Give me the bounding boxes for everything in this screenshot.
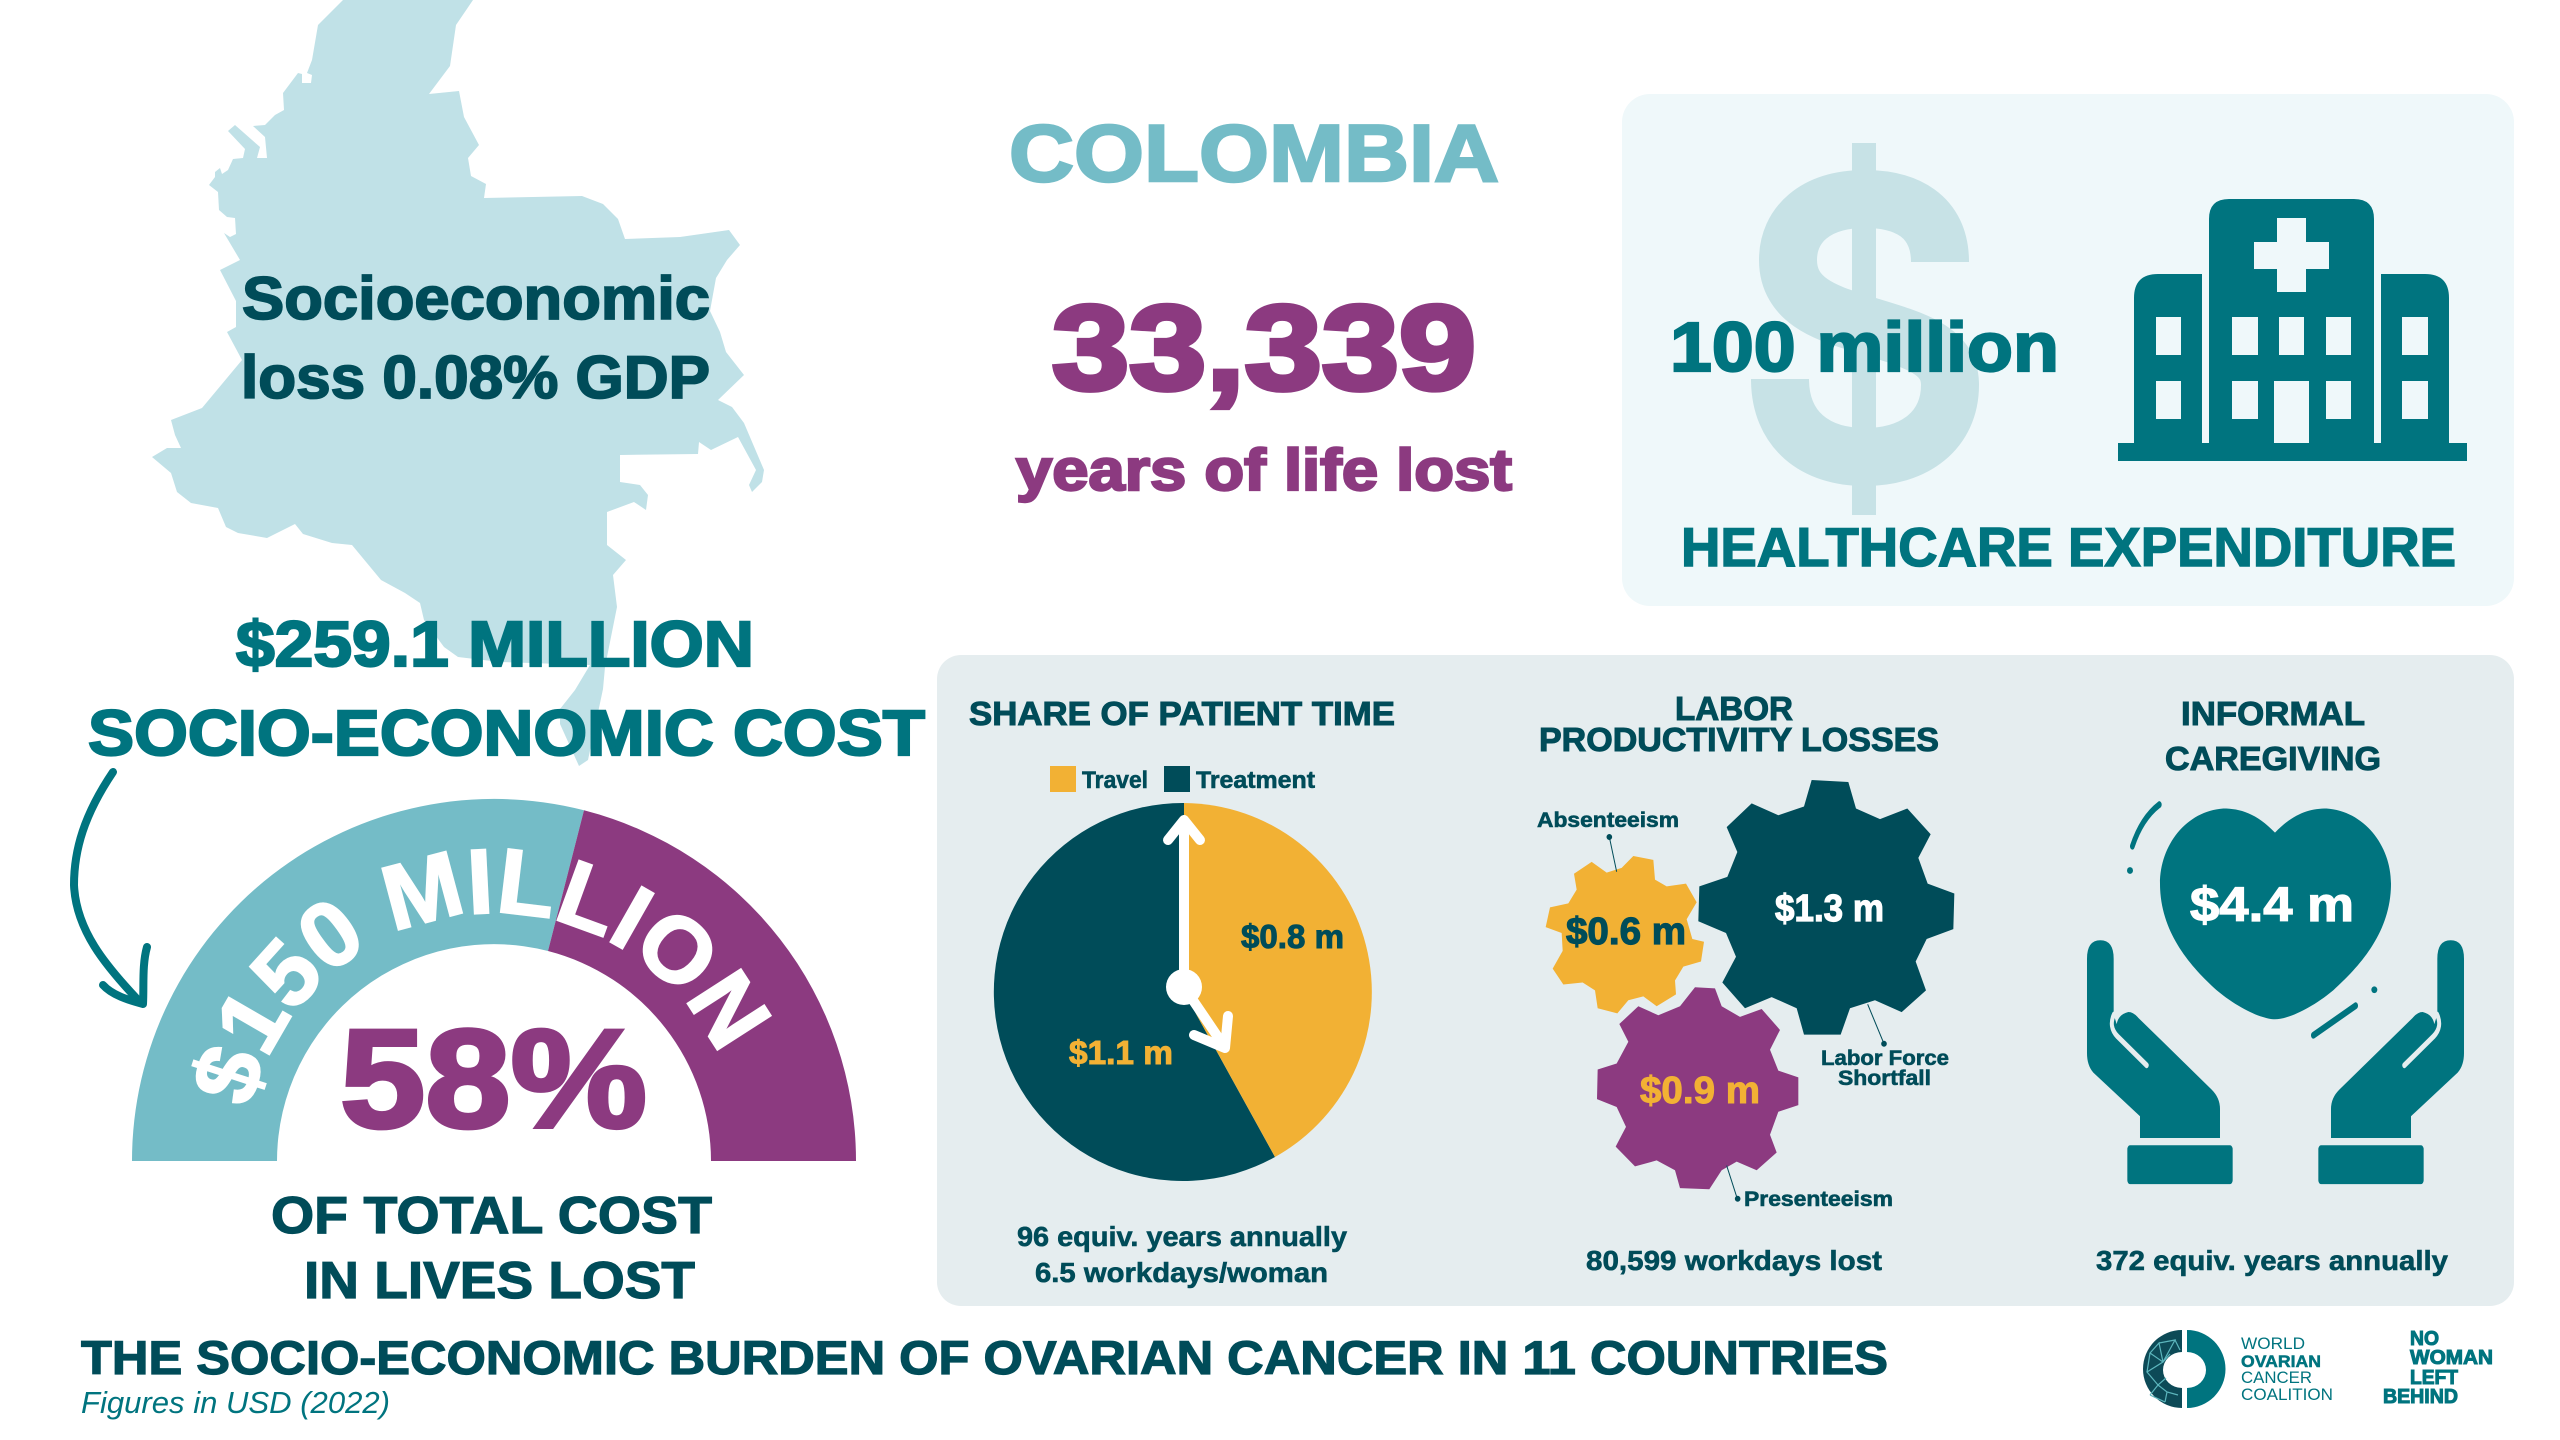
label: labor force shortfall [1821,1047,1949,1090]
logo: no woman left behind: BEHIND [2383,1386,2458,1408]
value: absenteeism: $0.6 m [1566,911,1686,953]
section: labor productivity losses [1537,690,1954,1276]
heading: total socio-economic cost: SOCIO-ECONOMIC COST [88,697,925,769]
icon: hospital [2118,199,2467,461]
panel: healthcare expenditure [1622,94,2514,606]
logo: no woman left behind [2383,1328,2493,1408]
label: presenteeism: Presenteeism [1744,1188,1893,1211]
note: caregiving years: 372 equiv. years annually [2096,1245,2448,1276]
heading: labor productivity losses: LABOR [1675,690,1793,727]
section: informal caregiving [2087,695,2464,1276]
label: labor force shortfall: Shortfall [1838,1067,1931,1090]
value: travel: $0.8 m [1241,918,1344,955]
title: country: COLOMBIA [1009,109,1499,199]
heading: share of patient time: SHARE OF PATIENT TIME [969,695,1395,732]
map caption: socioeconomic loss: Socioeconomic [242,265,710,332]
clock hands [1166,820,1228,1048]
icon: heart in hands [2087,805,2464,1184]
logo: no woman left behind: LEFT [2410,1367,2458,1389]
value: presenteeism: $0.9 m [1640,1070,1760,1112]
section: share of patient time [969,695,1395,1288]
gauge chart: lives lost share: $150 MILLION [191,848,772,1104]
gauge caption: IN LIVES LOST [304,1252,695,1310]
value: 100 million: 100 million [1670,308,2059,386]
legend [1050,766,1315,794]
logo: world ovarian cancer coalition [2143,1330,2333,1408]
gauge caption [271,1187,712,1310]
note: patient time: 96 equiv. years annually [1017,1221,1347,1252]
footer note: Figures in USD (2022) [81,1385,390,1420]
label: healthcare expenditure: HEALTHCARE EXPENDITURE [1681,516,2456,578]
map caption: socioeconomic loss [241,265,710,411]
arrow to gauge [74,772,147,1004]
pie chart [994,803,1372,1181]
heading: informal caregiving: CAREGIVING [2165,740,2381,777]
heading: informal caregiving: INFORMAL [2181,695,2365,732]
logo: no woman left behind: WOMAN [2410,1347,2493,1369]
gauge caption: OF TOTAL COST [271,1187,712,1245]
panel: cost breakdown [937,655,2514,1306]
logo: world ovarian cancer coalition: COALITION [2241,1385,2333,1404]
label: absenteeism: Absenteeism [1537,809,1679,832]
statistic: years of life lost: years of life lost [1016,438,1512,503]
heading: total socio-economic cost [88,608,925,769]
gauge value: 58% [340,1000,647,1157]
note: patient time: 6.5 workdays/woman [1035,1257,1328,1288]
heading: labor productivity losses: PRODUCTIVITY LOSSES [1539,721,1939,758]
gauge chart: lives lost share [132,798,856,1161]
logo: world ovarian cancer coalition: OVARIAN [2241,1352,2321,1371]
note: workdays lost: 80,599 workdays lost [1586,1245,1882,1276]
logo: world ovarian cancer coalition: CANCER [2241,1368,2312,1387]
value: treatment: $1.1 m [1069,1034,1173,1071]
icon: dollar sign [1780,143,1950,515]
map of Colombia [152,0,764,766]
logo: no woman left behind: NO [2410,1328,2439,1350]
note: patient time [1017,1221,1347,1288]
legend: Travel [1082,767,1148,794]
label: labor force shortfall: Labor Force [1821,1047,1949,1070]
statistic: years of life lost: 33,339 [1052,281,1476,415]
map caption: socioeconomic loss: loss 0.08% GDP [241,344,710,411]
gears [1546,780,1954,1201]
footer title: THE SOCIO-ECONOMIC BURDEN OF OVARIAN CANCER IN 11 COUNTRIES [81,1331,1888,1384]
legend: Treatment [1196,767,1315,794]
logo: world ovarian cancer coalition: WORLD [2241,1334,2305,1353]
value: labor force shortfall: $1.3 m [1775,888,1884,930]
statistic: years of life lost [1016,281,1512,503]
heading: total socio-economic cost: $259.1 MILLION [236,608,754,680]
heading: labor productivity losses [1539,690,1939,758]
heading: informal caregiving [2165,695,2381,777]
value: informal caregiving: $4.4 m [2190,879,2354,932]
